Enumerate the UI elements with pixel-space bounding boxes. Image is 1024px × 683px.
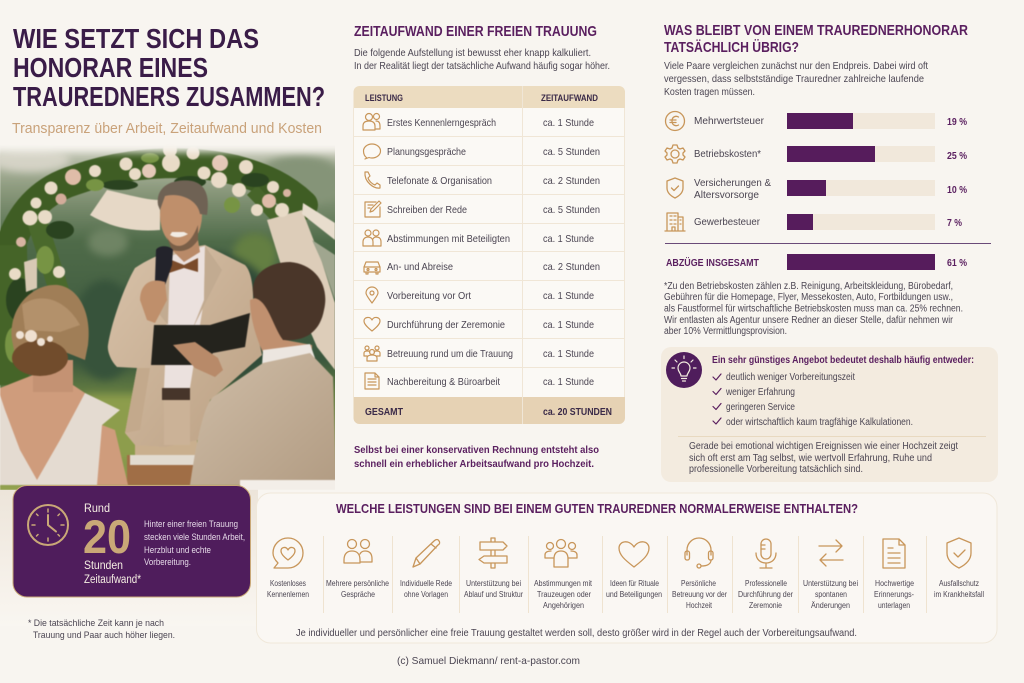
bar: Mehrwertsteuer bbox=[666, 112, 968, 130]
bar: Versicherungen: 10 % bbox=[947, 184, 968, 196]
footnote: Betriebskosten: aber 10% Vermittlungsprovision. bbox=[664, 326, 787, 337]
table bbox=[354, 86, 625, 424]
conclusion text: Selbst bei einer konservativen Rechnung entsteht also bbox=[354, 444, 599, 456]
bar: Betriebskosten: Betriebskosten* bbox=[694, 148, 761, 160]
card: rund 20 Stunden Zeitaufwand: Herzblut und echte bbox=[144, 545, 211, 555]
item: Persönliche Betreuung: Hochzeit bbox=[686, 601, 713, 610]
row: Durchführung bbox=[364, 317, 594, 331]
row: An- und Abreise: ca. 2 Stunden bbox=[543, 261, 600, 273]
item: Rituale: und Beteiligungen bbox=[606, 590, 662, 599]
row: Telefonate bbox=[365, 172, 600, 188]
card: rund 20 Stunden Zeitaufwand: Stunden bbox=[84, 560, 123, 572]
credit: (c) Samuel Diekmann/ rent-a-pastor.com bbox=[397, 655, 580, 667]
card: rund 20 Stunden Zeitaufwand: 20 bbox=[83, 510, 131, 563]
footnote: time bbox=[28, 618, 175, 641]
closing sentence: Je individueller und persönlicher eine freie Trauung gestaltet werden soll, desto größer wird in der Regel auch der Vorbereitungsaufwand. bbox=[296, 627, 857, 639]
item: Persönliche Betreuung bbox=[672, 538, 727, 610]
row: Vorbereitung vor Ort bbox=[366, 287, 594, 303]
item: Ablauf und Struktur bbox=[464, 538, 523, 599]
intro text bbox=[354, 47, 610, 72]
callout: cheap offer: professionelle Vorbereitung tatsächlich sind. bbox=[689, 464, 863, 475]
item: Kostenloses Kennenlernen: Kennenlernen bbox=[267, 590, 309, 599]
callout: cheap offer: Ein sehr günstiges Angebot bedeutet deshalb häufig entweder: bbox=[712, 355, 974, 366]
bar: Versicherungen bbox=[667, 177, 968, 201]
checklist: geringeren Service bbox=[726, 402, 795, 413]
card: rund 20 Stunden Zeitaufwand: stecken viele Stunden Arbeit, bbox=[144, 532, 245, 542]
bar: Versicherungen: Versicherungen & bbox=[694, 177, 771, 189]
row: Vorbereitung vor Ort: ca. 1 Stunde bbox=[543, 290, 594, 302]
item: Ausfallschutz: im Krankheitsfall bbox=[934, 590, 984, 599]
checklist: weniger Erfahrung bbox=[725, 387, 795, 398]
footnote: time: Trauung und Paar auch höher liegen. bbox=[33, 630, 175, 641]
item: Professionelle Durchführung: Durchführung der bbox=[738, 590, 793, 599]
item: Spontane Änderungen: Unterstützung bei bbox=[803, 579, 858, 588]
bride bbox=[0, 375, 128, 485]
item: Kostenloses Kennenlernen: Kostenloses bbox=[270, 579, 306, 588]
row: Nachbereitung bbox=[365, 373, 594, 389]
callout: cheap offer: Gerade bei emotional wichtigen Ereignissen wie einer Hochzeit zeigt bbox=[689, 441, 958, 452]
row: Abstimmungen: Abstimmungen mit Beteiligten bbox=[387, 233, 510, 245]
item: Ablauf und Struktur: Unterstützung bei bbox=[466, 579, 521, 588]
groom bbox=[250, 298, 313, 352]
checklist: deutlich weniger Vorbereitungszeit bbox=[726, 372, 855, 383]
item: Professionelle Durchführung: Professionelle bbox=[745, 579, 787, 588]
photo: officiant at a wedding ceremony bbox=[0, 143, 345, 490]
bar: Gewerbesteuer bbox=[665, 213, 963, 231]
bar: Betriebskosten bbox=[665, 145, 968, 163]
card: rund 20 Stunden Zeitaufwand: Hinter einer freien Trauung bbox=[144, 519, 238, 529]
title: TRAUREDNERS ZUSAMMEN? bbox=[13, 81, 325, 112]
checklist bbox=[713, 372, 913, 428]
bar: Gewerbesteuer: Gewerbesteuer bbox=[694, 216, 760, 228]
item: Mehrere persönliche Gespräche: Gespräche bbox=[341, 590, 375, 599]
footnote: Betriebskosten: als Faustformel für wirtschaftliche Betriebskosten muss man ca. 25% rechnen. bbox=[664, 304, 963, 314]
footnote: Betriebskosten: *Zu den Betriebskosten zählen z.B. Reinigung, Arbeitskleidung, Bürobedarf, bbox=[664, 281, 953, 292]
item: Spontane Änderungen: spontanen bbox=[815, 590, 847, 599]
row: Planungsgespräche: Planungsgespräche bbox=[387, 146, 466, 158]
conclusion text: schnell ein erheblicher Arbeitsaufwand pro Hochzeit. bbox=[354, 458, 594, 470]
item: Kostenloses Kennenlernen bbox=[267, 538, 309, 599]
heading: Honorar bbox=[664, 22, 968, 56]
footnote: Betriebskosten: Wir entlasten als Agentur unsere Redner an dieser Stelle, dafür nehmen wir bbox=[664, 315, 954, 326]
bar: total deductions: 61 % bbox=[947, 257, 968, 269]
bar: Mehrwertsteuer: 19 % bbox=[947, 116, 968, 128]
garland greenery bbox=[0, 148, 318, 246]
footnote: Betriebskosten: Gebühren für die Homepage, Flyer, Messekosten, Auto, Fortbildungen usw., bbox=[664, 292, 953, 303]
bar: Versicherungen: Altersvorsorge bbox=[694, 189, 759, 201]
bar: Betriebskosten: 25 % bbox=[947, 150, 968, 162]
row: Erstes Kennenlerngespräch: ca. 1 Stunde bbox=[543, 117, 594, 129]
row: Durchführung: Durchführung der Zeremonie bbox=[387, 319, 505, 331]
panel: Zeitaufwand bbox=[354, 23, 625, 470]
heading: Leistungen: WELCHE LEISTUNGEN SIND BEI EINEM GUTEN TRAUREDNER NORMALERWEISE ENTHALTEN? bbox=[336, 501, 858, 516]
footnote: time: * Die tatsächliche Zeit kann je nach bbox=[28, 618, 164, 629]
card: rund 20 Stunden Zeitaufwand: Rund bbox=[84, 503, 110, 515]
bar: total deductions: ABZÜGE INSGESAMT bbox=[666, 256, 759, 269]
row: Telefonate: ca. 2 Stunden bbox=[543, 175, 600, 187]
icon: light bulb bbox=[666, 352, 702, 388]
card: rund 20 Stunden Zeitaufwand bbox=[13, 486, 250, 597]
item: Individuelle Rede: ohne Vorlagen bbox=[404, 590, 448, 599]
item: Rituale bbox=[606, 542, 662, 599]
row: Abstimmungen: ca. 1 Stunde bbox=[543, 233, 594, 245]
callout: cheap offer bbox=[661, 347, 998, 482]
row: Schreiben der Rede bbox=[365, 201, 600, 217]
row: Durchführung: ca. 1 Stunde bbox=[543, 319, 594, 331]
item: Persönliche Betreuung: Betreuung vor der bbox=[672, 590, 727, 599]
item: Mehrere persönliche Gespräche bbox=[326, 540, 389, 599]
item: Abstimmungen: Abstimmungen mit bbox=[534, 579, 593, 588]
row: Betreuung: Betreuung rund um die Trauung bbox=[387, 348, 513, 360]
table: ZEITAUFWAND bbox=[541, 93, 598, 104]
row: Schreiben der Rede: Schreiben der Rede bbox=[387, 204, 467, 216]
item: Mehrere persönliche Gespräche: Mehrere persönliche bbox=[326, 579, 389, 588]
heading: Honorar: TATSÄCHLICH ÜBRIG? bbox=[664, 39, 799, 56]
subtitle: Transparenz über Arbeit, Zeitaufwand und Kosten bbox=[12, 121, 322, 137]
item: Individuelle Rede: Individuelle Rede bbox=[400, 579, 452, 588]
reading desk bbox=[127, 455, 193, 485]
item: Rituale: Ideen für Rituale bbox=[610, 579, 659, 588]
row: Abstimmungen bbox=[363, 230, 594, 246]
item: Professionelle Durchführung bbox=[738, 539, 793, 610]
intro text: Kosten tragen müssen. bbox=[664, 86, 755, 98]
heading: Honorar: WAS BLEIBT VON EINEM TRAUREDNERHONORAR bbox=[664, 22, 968, 39]
intro text: Die folgende Aufstellung ist bewusst eher knapp kalkuliert. bbox=[354, 47, 591, 59]
item: Ausfallschutz: Ausfallschutz bbox=[939, 579, 979, 588]
icon: clock bbox=[28, 505, 68, 545]
row: Betreuung: ca. 1 Stunde bbox=[543, 348, 594, 360]
row: An- und Abreise bbox=[364, 261, 600, 274]
row: Nachbereitung: ca. 1 Stunde bbox=[543, 376, 594, 388]
callout: cheap offer: sich oft erst am Tag selbst, wie wertvoll Erfahrung, Ruhe und bbox=[689, 453, 932, 464]
row: Planungsgespräche: ca. 5 Stunden bbox=[543, 146, 600, 158]
intro text bbox=[664, 60, 928, 98]
title bbox=[13, 23, 325, 112]
row: Erstes Kennenlerngespräch: Erstes Kennenlerngespräch bbox=[387, 117, 496, 129]
faded scene below the photo bbox=[0, 486, 258, 626]
row: Telefonate: Telefonate & Organisation bbox=[387, 175, 492, 187]
item: Professionelle Durchführung: Zeremonie bbox=[749, 601, 782, 610]
title: WIE SETZT SICH DAS bbox=[13, 23, 259, 54]
item: Erinnerungsunterlagen: Erinnerungs- bbox=[874, 590, 914, 599]
row: Betreuung bbox=[364, 346, 594, 361]
item: Abstimmungen bbox=[534, 540, 593, 610]
intro text: vergessen, dass selbstständige Trauredner zahlreiche laufende bbox=[664, 73, 924, 85]
item: Spontane Änderungen: Änderungen bbox=[811, 601, 850, 610]
row: Nachbereitung: Nachbereitung & Büroarbeit bbox=[387, 376, 500, 388]
drapes bbox=[90, 190, 160, 230]
row: Vorbereitung vor Ort: Vorbereitung vor Ort bbox=[387, 290, 471, 302]
panel: Leistungen bbox=[256, 493, 997, 643]
conclusion text bbox=[354, 444, 599, 470]
heading: Zeitaufwand: ZEITAUFWAND EINER FREIEN TRAUUNG bbox=[354, 23, 597, 40]
item: Erinnerungsunterlagen: Hochwertige bbox=[875, 579, 914, 588]
item: Individuelle Rede bbox=[400, 540, 452, 599]
bar chart bbox=[665, 112, 991, 270]
item: Persönliche Betreuung: Persönliche bbox=[681, 579, 716, 588]
row: total: ca. 20 STUNDEN bbox=[543, 406, 612, 418]
card: rund 20 Stunden Zeitaufwand: Zeitaufwand* bbox=[84, 574, 141, 586]
bar: total deductions bbox=[666, 254, 968, 270]
row: total: GESAMT bbox=[365, 406, 403, 418]
bar: Mehrwertsteuer: Mehrwertsteuer bbox=[694, 115, 764, 127]
panel: Honorar bbox=[661, 22, 998, 482]
row: total bbox=[365, 406, 612, 418]
card: rund 20 Stunden Zeitaufwand: Vorbereitung. bbox=[144, 557, 191, 567]
row: An- und Abreise: An- und Abreise bbox=[387, 261, 453, 273]
intro text: In der Realität liegt der tatsächliche Aufwand häufig sogar höher. bbox=[354, 60, 610, 72]
item: Ausfallschutz bbox=[934, 538, 984, 599]
checklist: oder wirtschaftlich kaum tragfähige Kalkulationen. bbox=[726, 417, 913, 428]
row: Schreiben der Rede: ca. 5 Stunden bbox=[543, 204, 600, 216]
row: Erstes Kennenlerngespräch bbox=[363, 114, 594, 130]
item: Erinnerungsunterlagen bbox=[874, 539, 914, 610]
intro text: Viele Paare vergleichen zunächst nur den Endpreis. Dabei wird oft bbox=[664, 60, 928, 72]
row: Planungsgespräche bbox=[364, 144, 600, 159]
officiant bbox=[134, 440, 198, 456]
item: Spontane Änderungen bbox=[803, 540, 858, 610]
item: Ablauf und Struktur: Ablauf und Struktur bbox=[464, 590, 523, 599]
item: Abstimmungen: Trauzeugen oder bbox=[537, 590, 591, 599]
item: Erinnerungsunterlagen: unterlagen bbox=[878, 601, 910, 610]
bar: Gewerbesteuer: 7 % bbox=[947, 217, 963, 229]
footnote: Betriebskosten bbox=[664, 281, 963, 337]
item: Abstimmungen: Angehörigen bbox=[543, 601, 584, 610]
title: HONORAR EINES bbox=[13, 52, 208, 83]
table: LEISTUNG bbox=[365, 93, 403, 104]
